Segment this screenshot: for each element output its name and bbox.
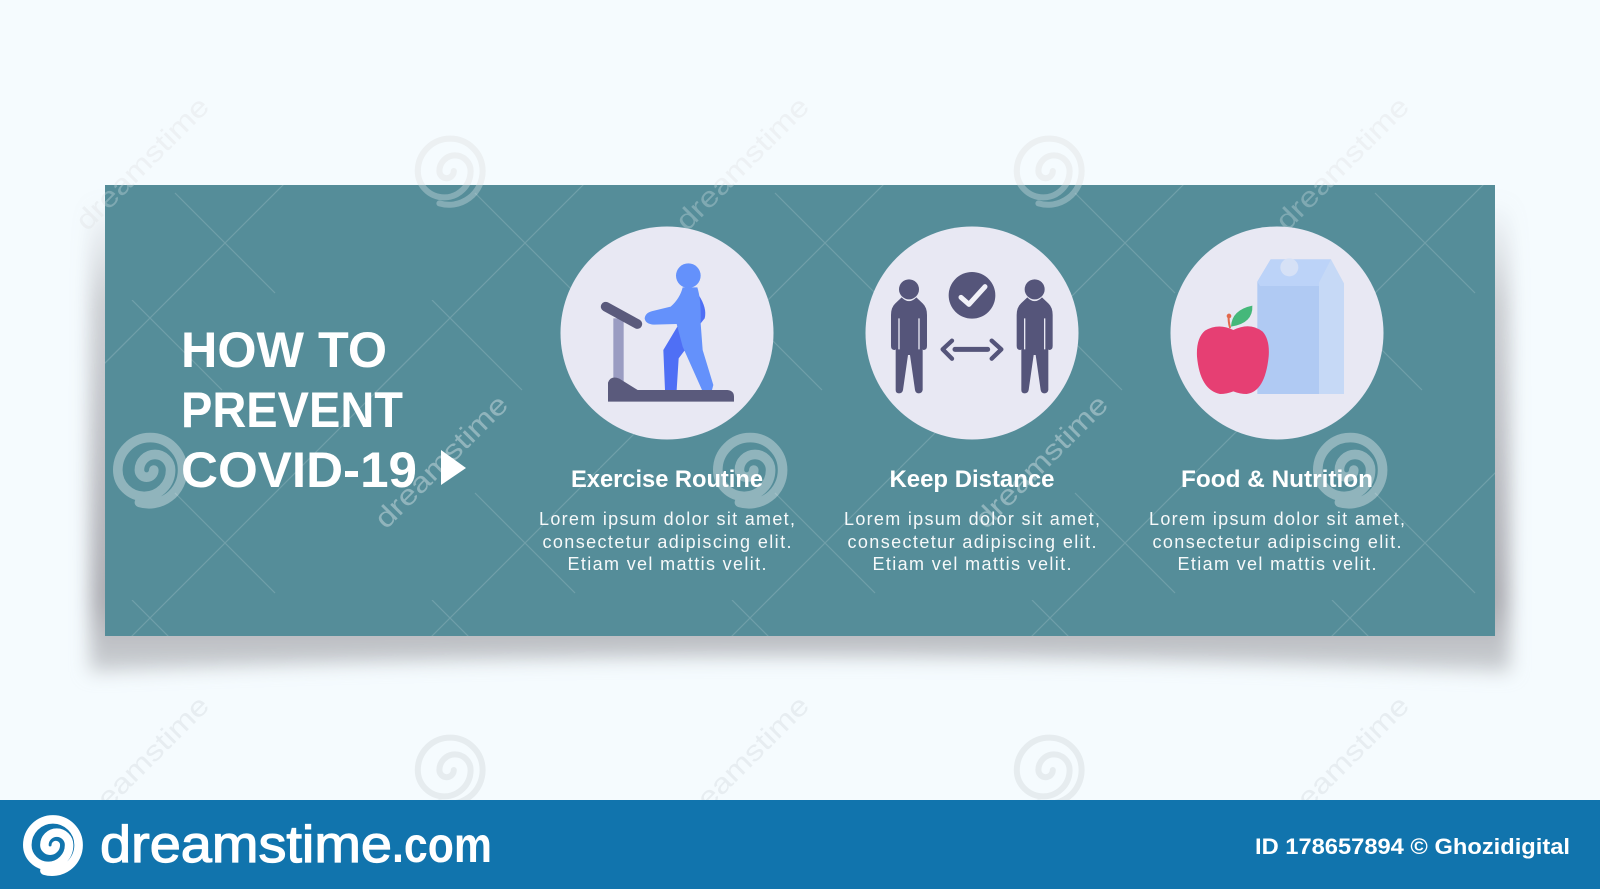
- panel watermarks: dreamstime: [1269, 91, 1415, 236]
- heading: keep distance: Keep Distance: [890, 466, 1054, 493]
- wordmark: [100, 816, 492, 874]
- icon circle: distance: [866, 226, 1078, 440]
- heading: exercise routine: Exercise Routine: [571, 466, 763, 493]
- body text: keep distance: Etiam vel mattis velit.: [872, 554, 1072, 574]
- title: PREVENT: [181, 382, 403, 438]
- column 2: keep distance: [844, 226, 1100, 574]
- panel: teal banner: [105, 185, 1495, 636]
- panel watermarks: dreamstime: [669, 91, 815, 236]
- icon: two people with distance check: [891, 272, 1053, 393]
- body text: exercise routine: consectetur adipiscing elit.: [542, 532, 792, 552]
- body text: food and nutrition: [1149, 509, 1405, 574]
- body text: food and nutrition: Lorem ipsum dolor sit amet,: [1149, 509, 1405, 529]
- arrow: title pointer: [441, 450, 466, 485]
- wordmark: dreamstime: [100, 816, 392, 874]
- heading: food and nutrition: Food & Nutrition: [1181, 466, 1373, 493]
- column 1: exercise routine: [539, 226, 795, 574]
- footer bar: [0, 800, 1600, 889]
- body text: exercise routine: [539, 509, 795, 574]
- body text: keep distance: [844, 509, 1100, 574]
- wordmark: .com: [392, 817, 492, 873]
- watermarks on light background: dreamstime: [669, 690, 815, 835]
- body text: food and nutrition: consectetur adipiscing elit.: [1152, 532, 1402, 552]
- panel watermarks: dreamstime: [968, 389, 1114, 534]
- panel watermarks: dreamstime: [368, 389, 514, 534]
- body text: food and nutrition: Etiam vel mattis velit.: [1178, 554, 1376, 574]
- body text: keep distance: Lorem ipsum dolor sit amet,: [844, 509, 1100, 529]
- icon circle: treadmill: [560, 226, 774, 440]
- watermarks on light background: [69, 91, 1415, 835]
- watermarks on light background: dreamstime: [69, 91, 215, 236]
- column 3: food and nutrition: [1149, 226, 1405, 574]
- watermarks on light background: dreamstime: [1269, 690, 1415, 835]
- icon circle: food: [1170, 226, 1384, 440]
- icon: treadmill and walker: [606, 263, 734, 402]
- body text: exercise routine: Etiam vel mattis velit.: [568, 554, 766, 574]
- watermarks on light background: dreamstime: [69, 690, 215, 835]
- body text: keep distance: consectetur adipiscing elit.: [848, 532, 1096, 552]
- panel drop shadow: [90, 200, 1510, 672]
- watermarks on light background: dreamstime: [669, 91, 815, 236]
- panel watermarks: [69, 91, 1415, 534]
- body text: exercise routine: Lorem ipsum dolor sit amet,: [539, 509, 795, 529]
- watermarks on light background: dreamstime: [1269, 91, 1415, 236]
- panel watermarks: dreamstime: [69, 91, 215, 236]
- title: HOW TO: [181, 322, 387, 378]
- icon: apple and milk carton: [1197, 258, 1344, 394]
- icon: spiral logo: [27, 819, 79, 872]
- image id and credit: ID 178657894 © Ghozidigital: [1255, 834, 1570, 859]
- title: [181, 322, 417, 498]
- title: COVID-19: [181, 442, 417, 498]
